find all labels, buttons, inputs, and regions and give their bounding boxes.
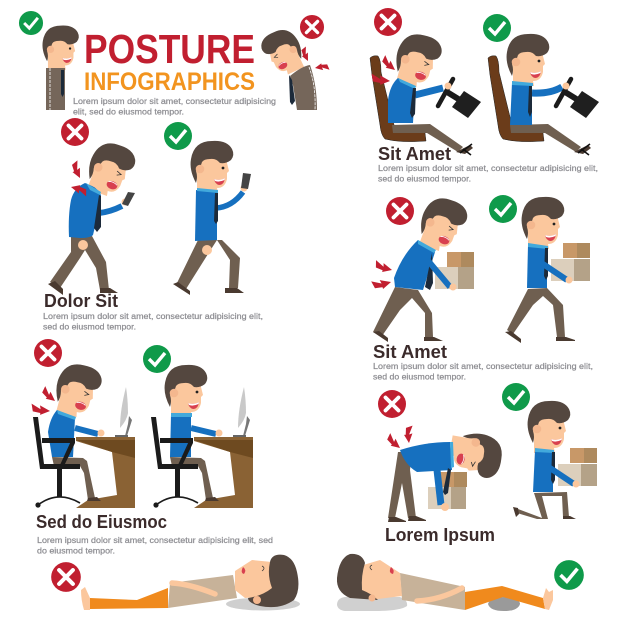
icon: desk check <box>143 345 171 373</box>
icon: carry check <box>489 195 517 223</box>
text: Dolor Sit description: sed do eiusmod tempor. <box>43 322 136 332</box>
text: driving description: Lorem ipsum dolor sit amet, consectetur adipisicing elit, <box>378 163 598 173</box>
intro text: Lorem ipsum dolor sit amet, consectetur adipisicing <box>73 96 276 106</box>
icon: carry cross <box>386 197 414 225</box>
figure: bad sleeping posture <box>81 555 300 610</box>
icon: phone check <box>164 122 192 150</box>
icon: good neck check <box>19 11 43 35</box>
icon: bad neck cross <box>300 15 324 39</box>
figure: good neck posture <box>42 26 79 110</box>
figure: good sleeping posture <box>337 554 553 611</box>
figure: good desk posture <box>151 365 253 508</box>
icon: car check <box>483 14 511 42</box>
icon: low lift cross <box>378 390 406 418</box>
heading: Lorem Ipsum: Lorem Ipsum <box>385 525 495 545</box>
title: POSTURE: POSTURE <box>84 26 255 72</box>
figure: bad neck posture <box>257 24 330 110</box>
icon: desk cross <box>34 339 62 367</box>
icon: car cross <box>374 8 402 36</box>
text: desk description: Lorem ipsum dolor sit amet, consectetur adipisicing elit, sed <box>37 535 273 545</box>
icon: sleep cross <box>51 562 81 592</box>
figure: good lifting posture <box>513 401 597 519</box>
text: driving description: sed do eiusmod tempor. <box>378 174 471 184</box>
figure: good driving posture <box>488 34 599 155</box>
icon: phone cross <box>61 118 89 146</box>
figure: bad lifting posture <box>384 426 505 522</box>
figure: bad driving posture <box>370 30 481 155</box>
heading: Dolor Sit: Dolor Sit <box>44 291 118 311</box>
figure: good phone posture <box>173 141 251 295</box>
text: carrying description: sed do eiusmod tempor. <box>373 372 466 382</box>
heading: Sit Amet (carrying): Sit Amet <box>373 342 447 362</box>
text: carrying description: Lorem ipsum dolor sit amet, consectetur adipisicing elit, <box>373 361 593 371</box>
figure: bad carrying posture <box>371 193 474 342</box>
figure: bad phone posture <box>48 138 139 295</box>
icon: sleep check <box>554 560 584 590</box>
heading: Sit Amet (driving): Sit Amet <box>378 144 451 164</box>
figure: bad desk posture <box>31 360 135 508</box>
icon: low lift check <box>502 383 530 411</box>
intro text: elit, sed do eiusmod tempor. <box>73 106 184 116</box>
heading: Sed do Eiusmoc: Sed do Eiusmoc <box>36 512 167 532</box>
text: Dolor Sit description: Lorem ipsum dolor sit amet, consectetur adipisicing elit, <box>43 311 263 321</box>
text: desk description: do eiusmod tempor. <box>37 546 115 556</box>
figure: good carrying posture <box>505 197 590 343</box>
title: INFOGRAPHICS: INFOGRAPHICS <box>84 68 255 96</box>
